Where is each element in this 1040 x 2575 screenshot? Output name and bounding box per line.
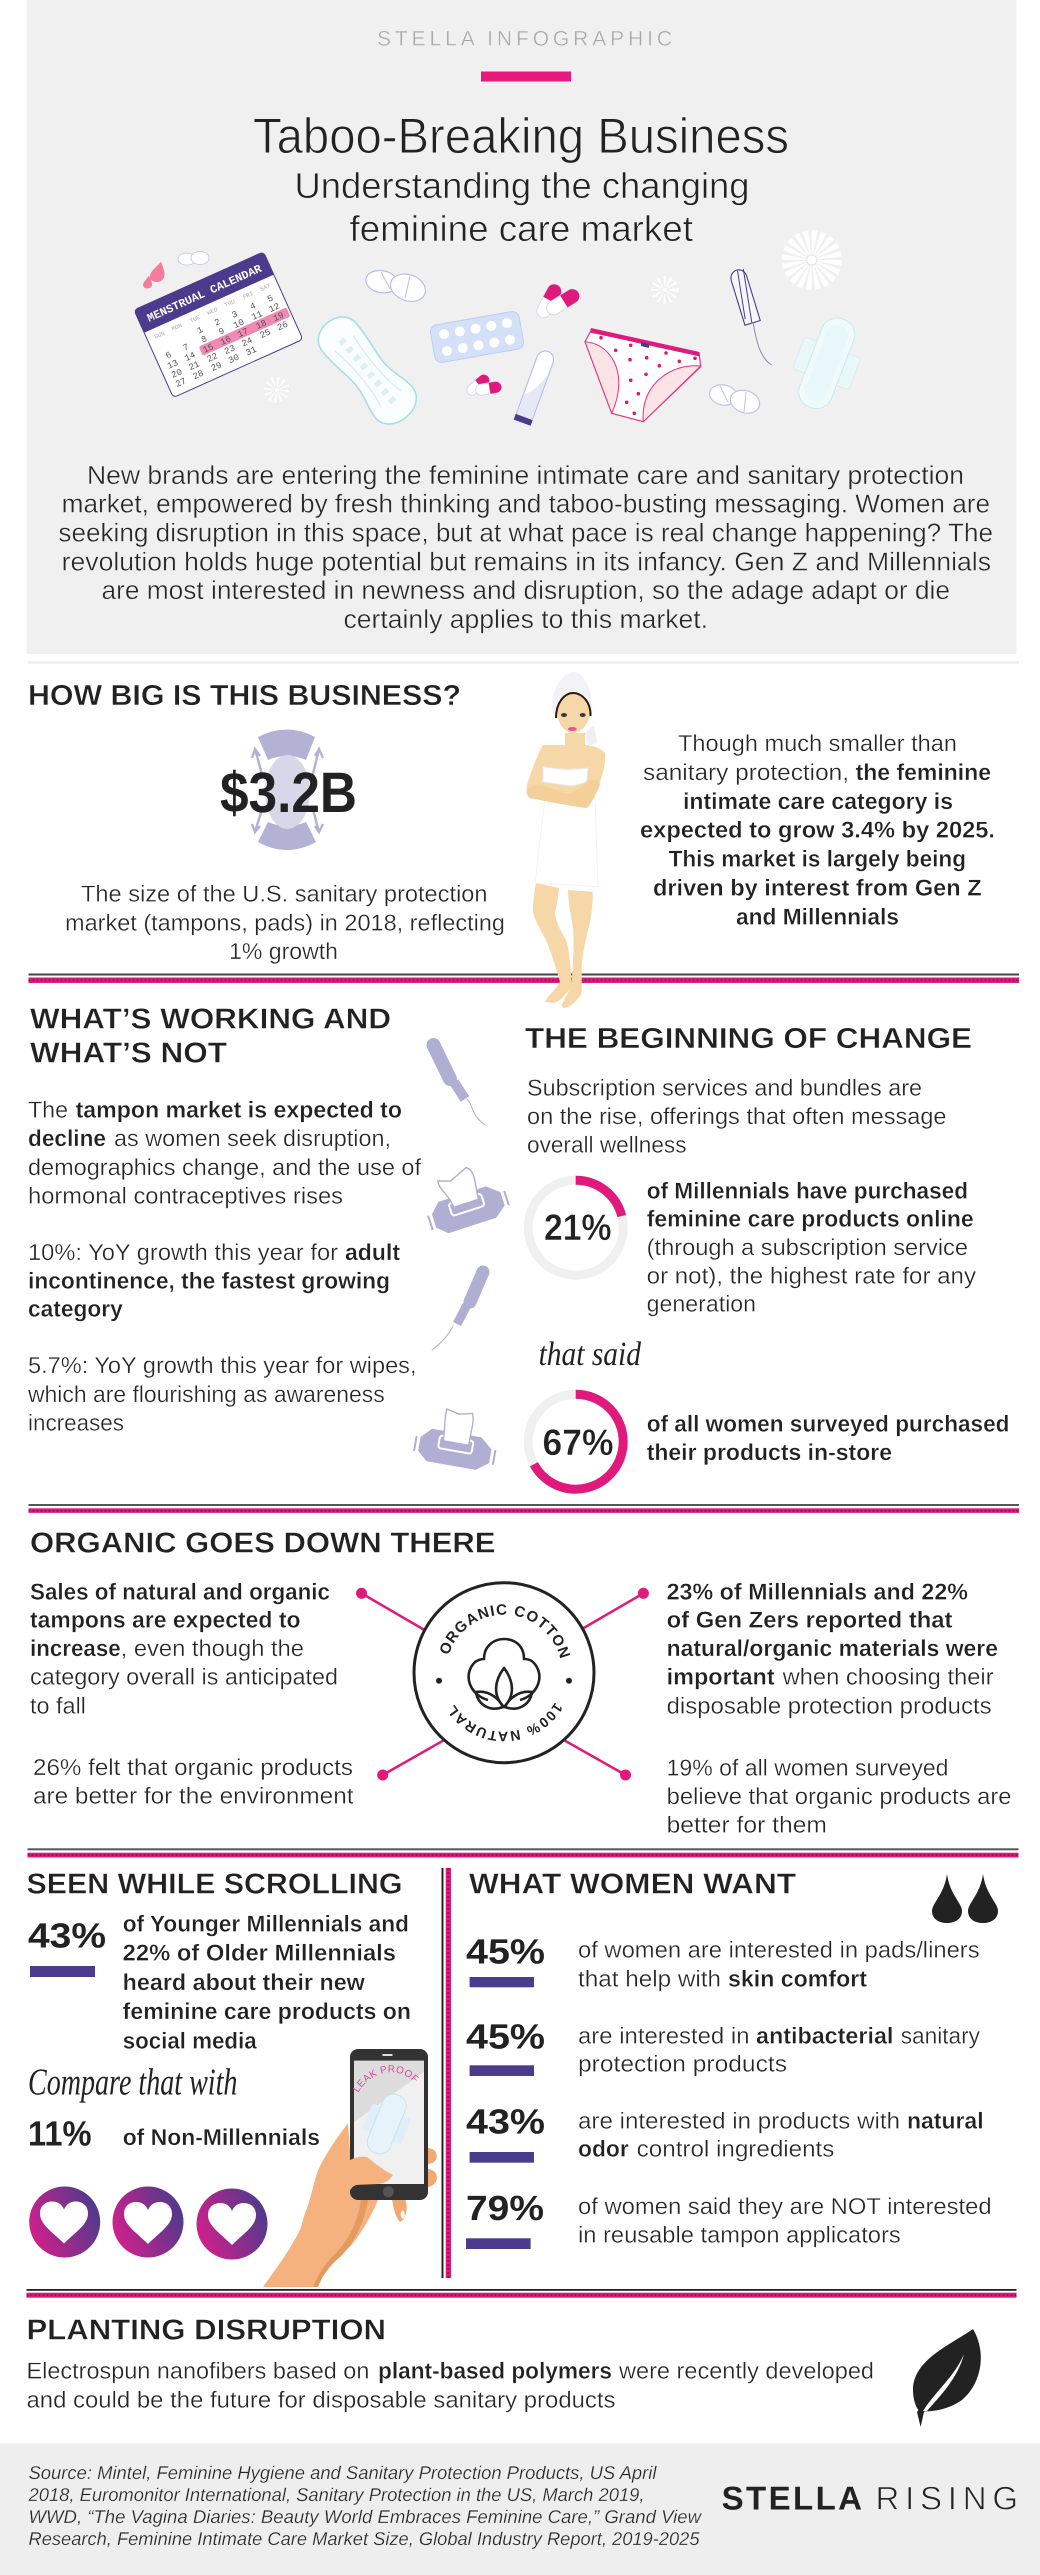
icon: blister pack	[429, 310, 525, 364]
illustration: hand holding phone	[263, 2049, 437, 2287]
panel: how big is this business	[28, 680, 995, 964]
item: natural odor: control ingredients	[637, 2136, 834, 2162]
heading: WHAT WOMEN WANT	[469, 1868, 796, 1900]
text: market size	[65, 881, 505, 964]
text: adult incontinence	[28, 1239, 400, 1322]
icon: menstrual calendar: 23	[223, 343, 237, 357]
fingernail	[401, 2210, 405, 2218]
text: millennials and gen z: 23% of Millennials and 22%	[667, 1578, 968, 1604]
right leg	[562, 890, 593, 1008]
badge: organic cotton	[412, 1581, 596, 1764]
brand label: STELLA INFOGRAPHIC	[377, 28, 672, 50]
icon: menstrual calendar: TUE	[189, 314, 202, 325]
connector lines	[356, 1588, 649, 1780]
text: in-store	[647, 1411, 1010, 1465]
shoulders and arms	[526, 733, 605, 808]
icon: menstrual calendar: 15	[202, 342, 215, 356]
text: millennials online: or not), the highest rate for any	[647, 1262, 977, 1288]
item: skin comfort: skin comfort	[728, 1966, 867, 1992]
logo: stella rising: STELLA	[722, 2479, 862, 2516]
item: reusable applicators: in reusable tampon applicators	[578, 2222, 901, 2248]
panel: whats working and whats not	[27, 1003, 511, 1473]
item: natural odor	[466, 2102, 984, 2163]
palm and wrist	[263, 2123, 378, 2287]
text: tampon market: as women seek disruption,	[114, 1125, 391, 1151]
text: millennials and gen z: disposable protection products	[667, 1692, 992, 1718]
text: adult incontinence: 10%: YoY growth this year for	[28, 1239, 338, 1265]
text: electrospun nanofibers: plant-based polymers	[378, 2357, 612, 2383]
text: natural and organic sales: Sales of natural and organic	[30, 1578, 330, 1604]
text: wipes: which are flourishing as awareness	[27, 1381, 385, 1407]
text: younger millennials	[123, 1911, 411, 2053]
item: natural odor: odor	[578, 2136, 629, 2162]
text: tampon market: hormonal contraceptives rises	[28, 1182, 343, 1208]
panel: organic goes down there	[30, 1527, 1012, 1838]
text: better for them: better for them	[667, 1812, 827, 1838]
text: tampon market: decline	[28, 1125, 106, 1151]
text: tampon market: The	[28, 1097, 68, 1123]
heading: WHAT’S WORKING AND	[30, 1003, 391, 1035]
icon: flower small centre	[656, 282, 674, 298]
text: younger millennials: heard about their new	[123, 1969, 365, 1995]
icon: menstrual calendar: 8	[200, 334, 209, 345]
text: electrospun nanofibers: were recently developed	[618, 2357, 874, 2383]
icon: capsules top	[534, 282, 582, 320]
badge text bottom: 100% NATURAL	[450, 1702, 562, 1742]
text: market size: 1% growth	[229, 938, 338, 964]
item: skin comfort: 45%	[466, 1932, 545, 1971]
text: millennials and gen z: important	[667, 1663, 775, 1689]
text: electrospun nanofibers: and could be the future for disposable sanitary products	[26, 2386, 616, 2412]
crossed forearm	[527, 780, 600, 808]
text: tampon market: demographics change, and the use of	[28, 1154, 422, 1180]
screen pad	[356, 2087, 418, 2161]
icon: heart 1	[29, 2186, 100, 2258]
script: compare that with: Compare that with	[28, 2061, 237, 2103]
icon: menstrual calendar: 29	[210, 360, 224, 374]
text: adult incontinence: incontinence, the fastest growing	[28, 1267, 390, 1293]
heading: HOW BIG IS THIS BUSINESS?	[28, 680, 461, 712]
logo: stella rising: RISING	[876, 2479, 1018, 2516]
text: natural and organic sales: tampons are expected to	[30, 1607, 300, 1633]
text: non-millennials: of Non-Millennials	[123, 2124, 320, 2150]
phone speaker	[382, 2054, 392, 2056]
text: younger millennials: social media	[123, 2027, 257, 2053]
icon: white tampon	[514, 348, 557, 426]
icon: underwear	[585, 328, 701, 422]
item: antibacterial: antibacterial	[756, 2022, 893, 2048]
icon: menstrual calendar: 16	[219, 334, 233, 348]
screen text: LEAK PROOF	[352, 2065, 420, 2092]
icon: menstrual calendar: 12	[268, 301, 282, 315]
text: in-store: their products in-store	[647, 1439, 892, 1465]
item: antibacterial	[466, 2017, 980, 2077]
heading: PLANTING DISRUPTION	[26, 2314, 386, 2346]
icon: menstrual calendar: 7	[182, 342, 191, 354]
icon: flower small left	[269, 382, 285, 398]
icon: menstrual calendar: 4	[249, 301, 258, 313]
stat: 43%: 43%	[28, 1917, 106, 1956]
chart: donut 67%	[528, 1394, 623, 1489]
script: that said: that said	[539, 1336, 642, 1373]
text: wipes	[27, 1352, 417, 1436]
text: electrospun nanofibers	[26, 2357, 874, 2412]
panel: header	[26, 0, 1016, 654]
icon: menstrual calendar: 6	[164, 350, 173, 361]
text: feminine intimate care	[640, 730, 995, 929]
text: market size: The size of the U.S. sanitary protection	[81, 881, 488, 907]
intro paragraph: New brands are entering the feminine intimate care and sanitary protection	[87, 460, 964, 490]
text: feminine intimate care: the feminine	[856, 759, 991, 785]
source text: Source: Mintel, Feminine Hygiene and Sanitary Protection Products, US April	[28, 2462, 657, 2483]
item: skin comfort: of women are interested in pads/liners	[578, 1937, 980, 1963]
source text: WWD, “The Vagina Diaries: Beauty World Embraces Feminine Care,” Grand View	[28, 2506, 703, 2527]
intro paragraph: are most interested in newness and disruption, so the adage adapt or die	[102, 575, 950, 605]
panel: planting disruption	[26, 2314, 981, 2427]
text: feminine intimate care: Though much smaller than	[678, 730, 957, 756]
text: better for environment	[33, 1754, 354, 1808]
text: wipes: increases	[28, 1410, 124, 1436]
icon: menstrual calendar: 3	[230, 309, 239, 321]
panel: footer	[0, 2443, 1040, 2575]
icon: menstrual calendar: MENSTRUAL CALENDAR	[145, 263, 264, 325]
icon: menstrual calendar: 28	[191, 369, 205, 382]
icon: pink drops	[143, 262, 165, 288]
text: tampon market	[28, 1097, 422, 1208]
icon: menstrual calendar: 27	[174, 376, 188, 390]
icon: cotton boll	[469, 1639, 539, 1709]
text: in-store: of all women surveyed purchased	[647, 1411, 1010, 1437]
item: reusable applicators: 79%	[466, 2189, 544, 2228]
icon: menstrual calendar: 17	[236, 327, 250, 340]
text: millennials online: (through a subscription service	[647, 1234, 968, 1260]
panel: the beginning of change	[525, 1023, 1010, 1489]
text: natural and organic sales: category overall is anticipated	[30, 1663, 338, 1689]
item: reusable applicators	[466, 2189, 992, 2249]
icon: menstrual calendar: 13	[166, 358, 180, 372]
icon: pad with wings	[782, 309, 872, 418]
icon: menstrual calendar: 10	[232, 317, 246, 331]
icon: menstrual calendar: 26	[276, 320, 290, 333]
badge text top: ORGANIC COTTON	[440, 1604, 570, 1658]
text: better for environment: are better for the environment	[33, 1782, 354, 1808]
source text: 2018, Euromonitor International, Sanitary Protection in the US, March 2019,	[28, 2484, 645, 2505]
icon: menstrual calendar: 5	[266, 293, 275, 305]
icon: menstrual calendar: WED	[206, 306, 219, 317]
icon: capsules lower	[465, 372, 502, 398]
intro paragraph	[58, 460, 993, 634]
title: feminine care market	[350, 208, 693, 249]
towel tail	[585, 725, 597, 746]
icon: leaf	[913, 2329, 981, 2427]
icon: menstrual calendar: 2	[213, 317, 222, 329]
icon: menstrual calendar: 9	[217, 326, 226, 338]
lips	[568, 727, 577, 731]
item: antibacterial: protection products	[578, 2051, 787, 2077]
text: millennials and gen z: natural/organic materials were	[667, 1635, 998, 1661]
towel body	[535, 798, 598, 887]
text: market size: market (tampons, pads) in 2018, reflecting	[65, 910, 505, 936]
text: feminine intimate care: sanitary protection,	[643, 759, 849, 785]
icon: tampon 2	[432, 1272, 483, 1350]
icon: menstrual calendar: 19	[272, 311, 286, 324]
icon: menstrual calendar: 1	[196, 325, 205, 336]
hair	[556, 693, 591, 718]
text: millennials online: generation	[647, 1291, 756, 1317]
left leg	[533, 883, 572, 1003]
text: adult incontinence: adult	[345, 1239, 400, 1265]
intro paragraph: market, empowered by fresh thinking and taboo-busting messaging. Women are	[62, 489, 990, 519]
icon: flower large	[794, 242, 830, 278]
text: subscription services	[527, 1075, 946, 1157]
text: millennials and gen z	[667, 1578, 998, 1718]
logo: stella rising	[722, 2479, 1018, 2516]
source text	[28, 2462, 703, 2549]
text: natural and organic sales: to fall	[30, 1692, 86, 1718]
icon: menstrual calendar: 31	[244, 345, 258, 358]
icon: menstrual calendar: 30	[227, 353, 241, 366]
icon: menstrual calendar: 14	[183, 350, 197, 364]
item: skin comfort	[466, 1932, 980, 1992]
phone screen	[354, 2061, 424, 2184]
icon: menstrual calendar: 24	[240, 336, 254, 349]
icon: menstrual calendar: SAT	[259, 282, 272, 293]
face	[557, 694, 590, 733]
stat: $3.2B: $3.2B	[220, 761, 357, 825]
icon: wipes 2	[413, 1405, 501, 1473]
chest towel	[543, 767, 588, 786]
icon: menstrual calendar: 20	[170, 367, 184, 381]
text: natural and organic sales: increase	[30, 1635, 121, 1661]
phone	[350, 2049, 428, 2200]
panel: what women want	[466, 1868, 998, 2249]
heading: SEEN WHILE SCROLLING	[26, 1868, 402, 1900]
text: better for them: 19% of all women surveyed	[667, 1755, 948, 1781]
item: natural odor: are interested in products with	[578, 2107, 900, 2133]
intro paragraph: seeking disruption in this space, but at what pace is real change happening? The	[58, 518, 993, 548]
text: subscription services: overall wellness	[527, 1131, 686, 1157]
text: adult incontinence: category	[28, 1296, 123, 1322]
badge dots	[436, 1678, 572, 1684]
text: millennials online: of Millennials have purchased	[647, 1177, 968, 1203]
stat: 11%: 11%	[28, 2115, 92, 2154]
title: Understanding the changing	[294, 165, 750, 206]
icon: menstrual calendar: FRI	[242, 290, 254, 301]
towel on head	[552, 672, 592, 718]
chart: donut 21%	[528, 1180, 623, 1275]
text: millennials online	[647, 1177, 977, 1317]
icon: striped tampon	[729, 268, 772, 365]
icon: menstrual calendar: MON	[171, 322, 184, 333]
text: younger millennials: of Younger Millennials and	[123, 1911, 409, 1937]
item: reusable applicators: of women said they are NOT interested	[578, 2193, 992, 2219]
text: feminine intimate care: and Millennials	[736, 903, 899, 929]
icon: menstrual calendar: 22	[206, 351, 220, 365]
eyes	[561, 713, 586, 717]
icon: heart 2	[112, 2186, 184, 2258]
icon: menstrual calendar: THU	[223, 298, 237, 309]
icon: heart 3	[196, 2188, 268, 2260]
title: Taboo-Breaking Business	[253, 108, 789, 164]
item: antibacterial: are interested in	[578, 2022, 750, 2048]
hand shadow	[313, 2200, 368, 2287]
pink accent bar	[481, 72, 571, 82]
text: younger millennials: feminine care products on	[123, 1998, 411, 2024]
text: feminine intimate care: expected to grow 3.4% by 2025.	[640, 817, 995, 843]
text: natural and organic sales	[30, 1578, 338, 1718]
heading	[30, 1003, 391, 1070]
icon: menstrual calendar	[134, 252, 303, 398]
fingers	[392, 2148, 437, 2222]
text: millennials and gen z: of Gen Zers reported that	[667, 1607, 953, 1633]
item: natural odor: 43%	[466, 2102, 545, 2141]
thumb	[322, 2157, 393, 2200]
text: feminine intimate care: This market is largely being	[669, 846, 966, 872]
heading: WHAT’S NOT	[30, 1038, 227, 1070]
text: feminine intimate care: driven by interest from Gen Z	[653, 875, 982, 901]
illustration: woman in towel	[526, 672, 605, 1008]
text: tampon market: tampon market is expected to	[76, 1097, 402, 1123]
heading: ORGANIC GOES DOWN THERE	[30, 1527, 495, 1559]
icon: small pills	[178, 252, 209, 265]
intro paragraph: certainly applies to this market.	[344, 604, 708, 634]
icon: menstrual calendar: SUN	[153, 330, 166, 341]
panel: seen while scrolling	[26, 1868, 437, 2287]
text: millennials and gen z: when choosing their	[782, 1663, 994, 1689]
icon: wipes 1	[418, 1159, 511, 1238]
icon: menstrual calendar: 21	[187, 359, 201, 373]
icon: pills lower right	[708, 382, 763, 417]
source text: Research, Feminine Intimate Care Market Size, Global Industry Report, 2019-2025	[28, 2528, 700, 2549]
item: skin comfort: that help with	[578, 1966, 721, 1992]
text: electrospun nanofibers: Electrospun nanofibers based on	[26, 2357, 369, 2383]
icon: large pills	[364, 268, 429, 306]
icon: menstrual calendar: 25	[259, 327, 272, 341]
title	[253, 108, 789, 249]
icon: menstrual calendar: 18	[254, 318, 268, 332]
phone button	[383, 2186, 394, 2197]
text: better for environment: 26% felt that organic products	[33, 1754, 353, 1780]
text: feminine intimate care: intimate care category is	[683, 788, 953, 814]
text: subscription services: on the rise, offerings that often message	[527, 1103, 946, 1129]
item: antibacterial: 45%	[466, 2017, 545, 2056]
icon: lavender pad behind stat	[252, 730, 323, 850]
icon: tampon 1	[434, 1045, 485, 1125]
icon: drops	[932, 1874, 998, 1923]
text: natural and organic sales: , even though the	[121, 1635, 304, 1661]
intro paragraph: revolution holds huge potential but remains in its infancy. Gen Z and Millennials	[62, 546, 991, 576]
text: younger millennials: 22% of Older Millennials	[123, 1940, 396, 1966]
item: natural odor: natural	[907, 2107, 984, 2133]
text: better for them: believe that organic products are	[667, 1783, 1012, 1809]
item: antibacterial: sanitary	[901, 2022, 980, 2048]
text: better for them	[667, 1755, 1012, 1838]
text: subscription services: Subscription services and bundles are	[527, 1075, 922, 1101]
text: wipes: 5.7%: YoY growth this year for wipes,	[28, 1352, 416, 1378]
icon: sanitary pad	[309, 307, 425, 433]
heading: THE BEGINNING OF CHANGE	[525, 1023, 972, 1055]
icon: menstrual calendar: 11	[250, 309, 264, 323]
chart: donut 67%: 67%	[542, 1422, 614, 1463]
accent bar	[30, 1966, 95, 1977]
text: millennials online: feminine care products online	[647, 1206, 974, 1232]
chart: donut 21%: 21%	[544, 1207, 612, 1248]
